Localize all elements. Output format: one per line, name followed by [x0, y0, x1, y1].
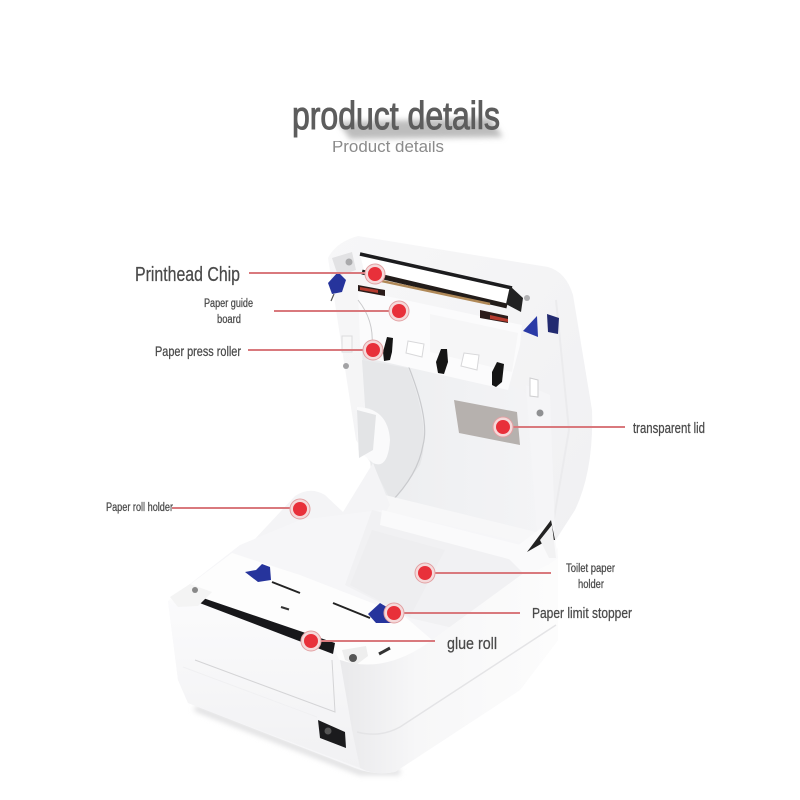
printer base: [168, 510, 558, 773]
label: Paper guide board: [204, 298, 253, 326]
label: Printhead Chip: Printhead Chip: [135, 264, 240, 286]
label: Paper press roller: Paper press roller: [155, 343, 241, 359]
subtitle: Product details: [332, 137, 444, 156]
front face: [168, 598, 360, 768]
transparent window: [454, 400, 520, 445]
roller clips: [383, 337, 504, 387]
front flap outline: [195, 660, 335, 712]
label: Toilet paper holder: Toilet paper: [566, 563, 615, 575]
label: Toilet paper holder: [566, 563, 615, 591]
left hinge with blue latch: [328, 252, 356, 301]
paper exit slot: [197, 598, 335, 654]
ground shadow: [195, 708, 400, 772]
right guide hinge: [342, 646, 390, 665]
toilet paper holder arm: [505, 520, 558, 575]
paper well: [345, 510, 548, 632]
left paper slider: [245, 564, 300, 593]
paper windows: [406, 341, 479, 370]
printer lid: [328, 236, 592, 552]
label: Toilet paper holder: holder: [578, 579, 604, 591]
right paper slider: [333, 603, 392, 623]
label: Paper guide board: Paper guide: [204, 298, 253, 310]
label: Paper guide board: board: [217, 314, 241, 326]
paper roll holder: [240, 407, 390, 590]
lid interior: [360, 317, 548, 545]
top deck: [168, 553, 432, 668]
printhead bar: [358, 254, 523, 323]
title: product details: [292, 95, 500, 138]
title block: [292, 95, 510, 156]
label: Paper limit stopper: Paper limit stopper: [532, 605, 632, 622]
power switch: [318, 720, 346, 748]
label: glue roll: glue roll: [447, 634, 497, 653]
printer illustration: [168, 236, 592, 773]
right side face: [340, 548, 558, 773]
callout dots: [290, 264, 513, 651]
paper guide board: [358, 290, 522, 390]
callout lines: [172, 273, 625, 641]
label: Paper roll holder: Paper roll holder: [106, 502, 173, 514]
side slots and screws: [342, 300, 544, 416]
subtitle mask and blurred title smear: [320, 118, 510, 141]
left guide hinge: [170, 584, 212, 607]
right blue latch: [523, 295, 559, 337]
label: transparent lid: transparent lid: [633, 420, 705, 437]
